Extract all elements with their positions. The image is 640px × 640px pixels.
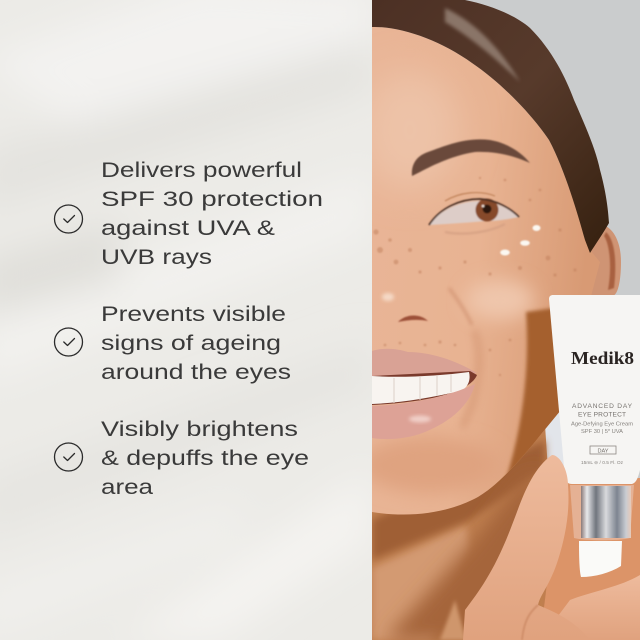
eye	[429, 193, 519, 234]
icon: cream dots	[500, 225, 540, 256]
benefit 3	[54, 418, 309, 499]
text: brightens and depuffs: Visibly brightens	[101, 418, 298, 441]
neck and chest	[372, 425, 560, 640]
text: brightens and depuffs	[101, 418, 309, 499]
freckles	[373, 177, 577, 376]
text: brightens and depuffs: area	[101, 476, 153, 499]
mouth	[372, 349, 477, 439]
day tag: DAY	[597, 448, 609, 454]
text: SPF protection: Delivers powerful	[101, 159, 302, 182]
benefit 1	[54, 159, 323, 269]
hair highlight	[445, 8, 520, 82]
icon: check circle	[54, 205, 82, 233]
text: ageing signs: signs of ageing	[101, 332, 281, 355]
ear	[591, 226, 621, 295]
silver cap	[570, 485, 634, 540]
benefit 2	[54, 303, 291, 384]
product name: EYE PROTECT	[578, 412, 626, 418]
text: SPF protection: UVB rays	[101, 246, 212, 269]
face	[360, 27, 600, 515]
product description: SPF 30 | 5* UVA	[581, 429, 623, 435]
panel: portrait photo	[360, 0, 640, 640]
nostril	[398, 315, 428, 322]
white nozzle	[579, 541, 622, 577]
product name: ADVANCED DAY	[572, 403, 633, 410]
eyebrow	[412, 139, 530, 176]
product description: Age-Defying Eye Cream	[571, 422, 634, 428]
photo backdrop	[381, 0, 640, 478]
icon: check circle	[54, 328, 82, 356]
icon: check circle	[54, 443, 82, 471]
text: SPF protection: SPF 30 protection	[101, 188, 323, 211]
panel: left soft light background	[0, 64, 367, 518]
product description	[571, 422, 634, 435]
gap of light behind the jaw	[545, 412, 564, 466]
text: ageing signs	[101, 303, 291, 384]
product name	[572, 404, 632, 416]
hand behind tube	[544, 478, 640, 615]
product tube	[549, 295, 640, 484]
text: brightens and depuffs: & depuffs the eye	[101, 447, 309, 470]
brand name: Medik8	[571, 348, 634, 368]
volume text: 15mL ⊖ / 0.5 Fl. Oz	[581, 460, 624, 465]
hand	[463, 455, 640, 640]
text: ageing signs: Prevents visible	[101, 303, 286, 326]
day tag	[590, 446, 616, 454]
hair	[372, 0, 609, 253]
text: SPF protection	[101, 159, 323, 269]
text: ageing signs: around the eyes	[101, 361, 291, 384]
text: SPF protection: against UVA &	[101, 217, 275, 240]
